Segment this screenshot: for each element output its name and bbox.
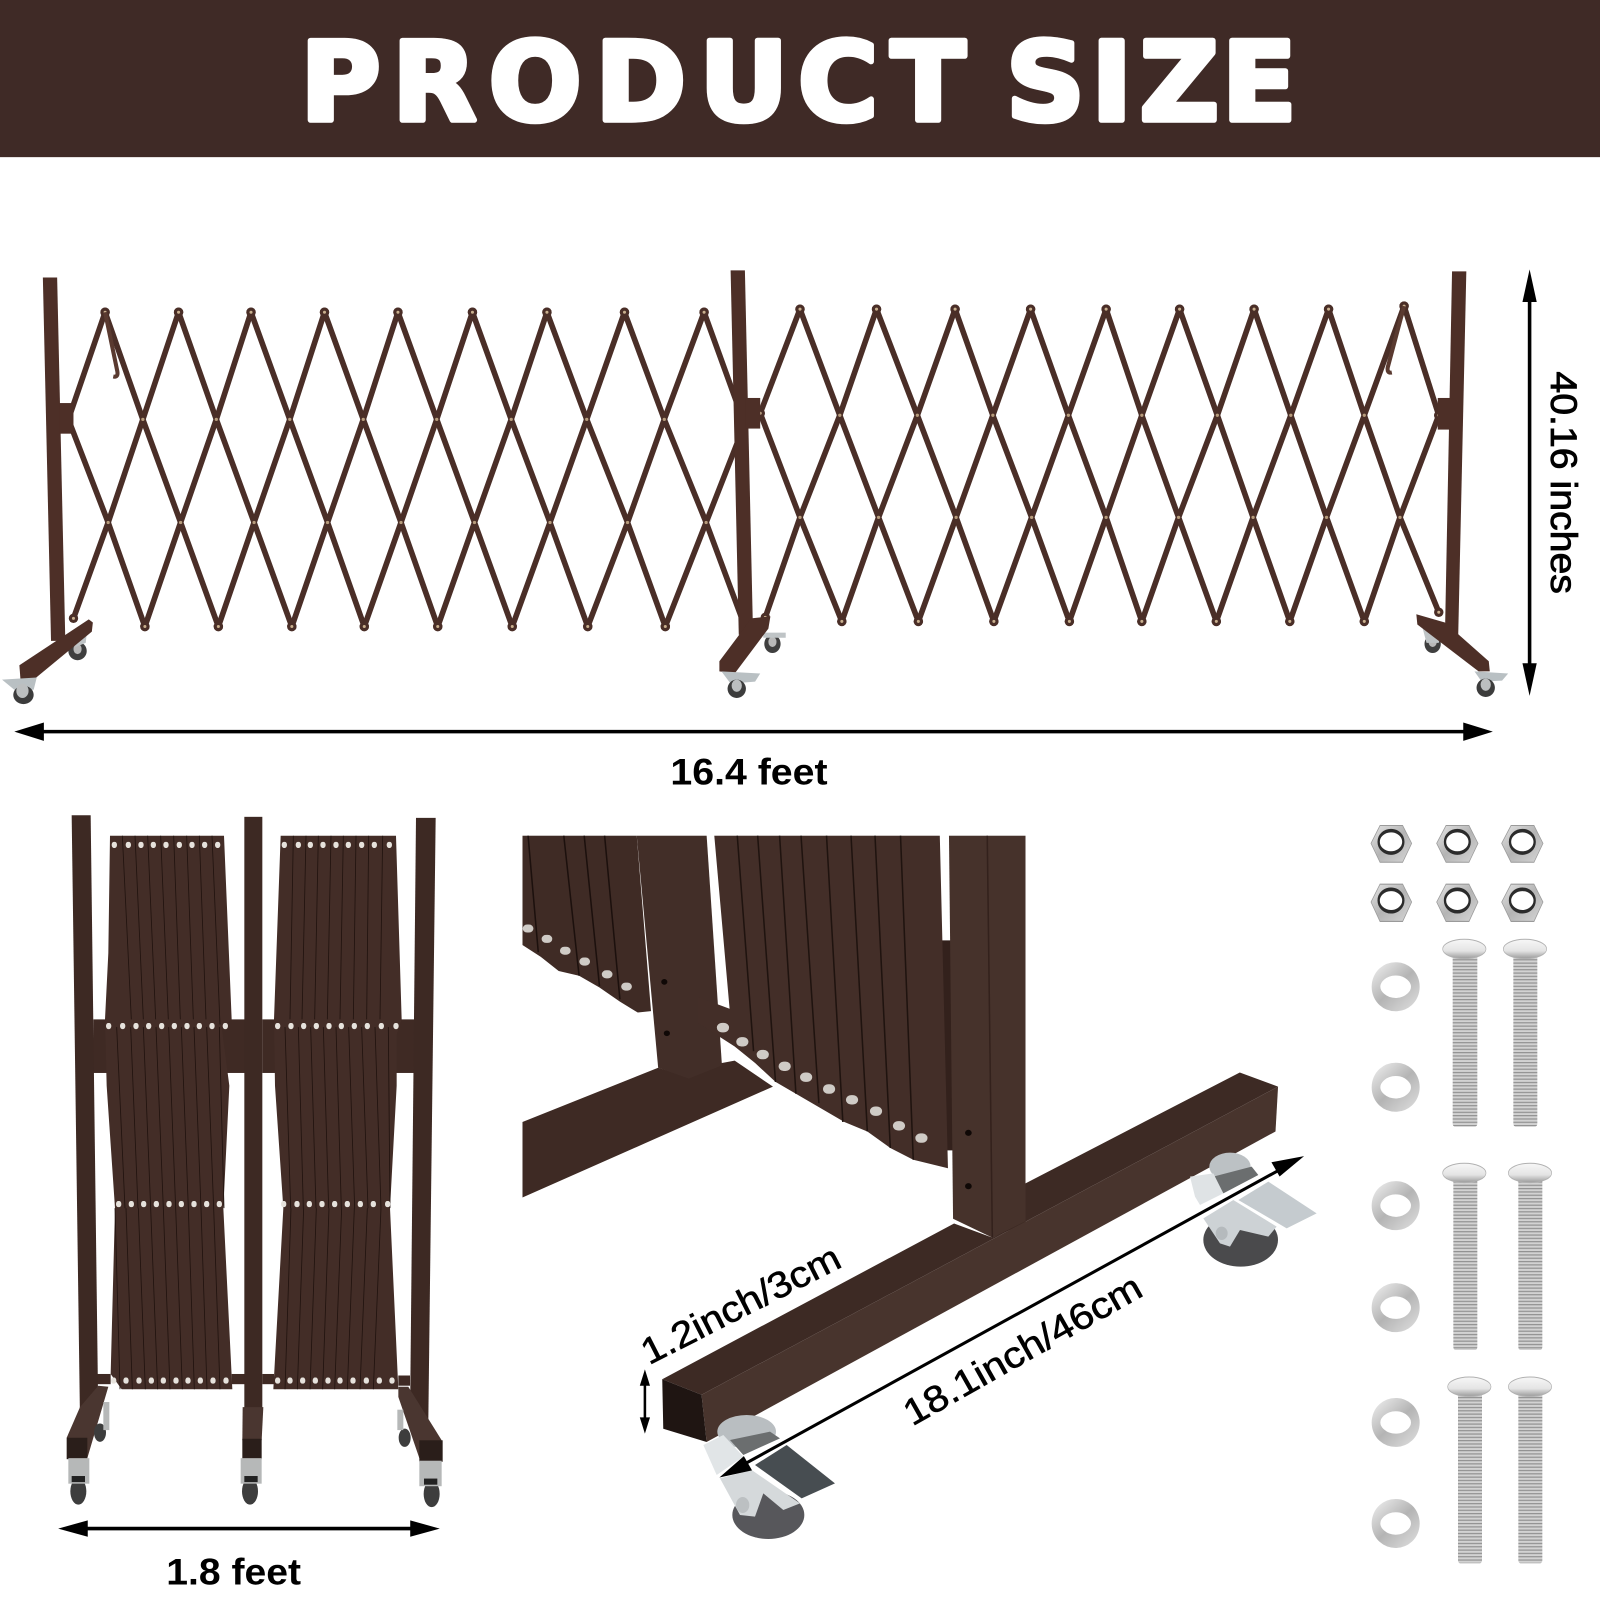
- width arrow: 1.8 feet: [58, 1520, 440, 1537]
- front rivets: [722, 1028, 922, 1138]
- header band: [0, 0, 1600, 157]
- middle post and base: [719, 270, 770, 673]
- dimension arrow: 1.2 inch: [640, 1369, 650, 1434]
- label: 1.8 feet: 1.8 feet: [166, 1552, 301, 1593]
- floor foot: [662, 1072, 1278, 1442]
- rear casters: [68, 624, 1441, 660]
- nut holes: [1379, 831, 1535, 912]
- label: 1.2inch/3cm: 1.2inch/3cm: [634, 1237, 847, 1372]
- back fence slats: [522, 836, 651, 1013]
- label: 16.4 feet: 16.4 feet: [670, 752, 828, 793]
- lattice: right section: [760, 306, 1439, 621]
- bases: [67, 1386, 443, 1462]
- right folded panel: [273, 836, 402, 1389]
- rear bracket behind front post: [942, 940, 952, 1150]
- right post and base: [1416, 271, 1490, 671]
- front post: [949, 836, 1026, 1238]
- rivets: [277, 845, 397, 1381]
- bolt shanks: [1453, 953, 1542, 1563]
- height arrow: 40.16 inches: [1522, 269, 1537, 696]
- rivets: [108, 845, 227, 1381]
- rear caster close-up: [1190, 1153, 1317, 1267]
- posts: [72, 815, 436, 1421]
- back foot: [522, 1061, 773, 1198]
- front caster close-up: [703, 1415, 835, 1539]
- base close-up photo: [522, 836, 1278, 1442]
- bolt heads: [1443, 939, 1552, 1396]
- washers: [1376, 969, 1415, 1541]
- cross bars: [93, 1019, 415, 1386]
- back post: [637, 836, 722, 1079]
- hardware set: [1371, 826, 1552, 1563]
- folded fence photo: [67, 815, 443, 1507]
- lock nuts: [1371, 826, 1543, 921]
- left folded panel: [105, 836, 232, 1389]
- dimension arrow: 18.1inch/46cm: [719, 1156, 1304, 1478]
- casters: [68, 1402, 442, 1507]
- front slats: [698, 836, 948, 1168]
- title: PRODUCT SIZE: [301, 19, 1297, 146]
- hooks: [105, 306, 1404, 377]
- left post and base: [19, 278, 93, 680]
- extended fence photo: [2, 270, 1508, 704]
- width arrow: 16.4 feet: [14, 722, 1493, 741]
- label: 18.1inch/46cm: 18.1inch/46cm: [896, 1266, 1149, 1433]
- front casters: [2, 671, 1508, 704]
- lattice: left section: [68, 312, 745, 627]
- back rivets: [527, 929, 628, 987]
- label: 40.16 inches: 40.16 inches: [1543, 371, 1584, 594]
